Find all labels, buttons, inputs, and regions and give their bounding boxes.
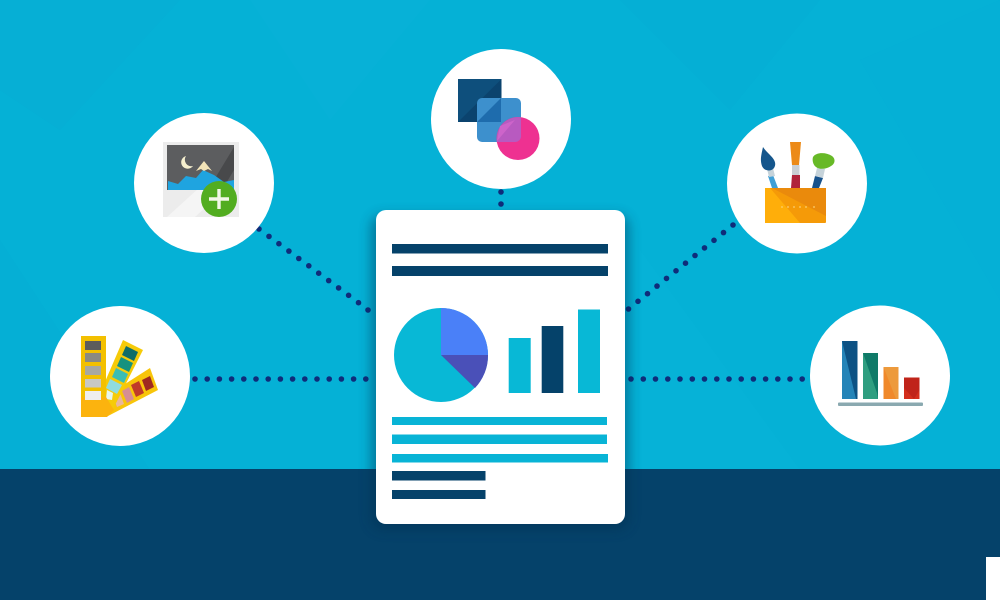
chart baseline	[838, 402, 923, 406]
red swatch strip	[100, 368, 158, 416]
orange bar	[884, 367, 898, 399]
right brush	[812, 153, 835, 188]
background: blue sky	[0, 0, 1000, 470]
icon circle: colour swatches	[50, 306, 190, 446]
pot stitching dots	[781, 206, 815, 208]
centre brush	[790, 142, 801, 188]
document page	[376, 210, 625, 524]
heading lines	[392, 244, 608, 276]
red bar	[904, 378, 920, 399]
photo mountains	[168, 170, 234, 190]
blue rounded square	[477, 98, 521, 142]
blue bar	[842, 341, 858, 399]
icon circle: add image	[134, 113, 274, 253]
short text lines	[392, 471, 486, 499]
photo frame	[163, 142, 239, 217]
dotted connector: left	[192, 376, 369, 382]
snow peak	[196, 161, 212, 171]
green bar	[863, 353, 878, 399]
dotted connector: upper right	[626, 222, 736, 312]
dotted connector: right	[628, 376, 805, 382]
document shadow	[371, 215, 629, 530]
pie chart	[394, 308, 488, 402]
grey swatch strip	[81, 336, 114, 417]
dark square	[458, 79, 502, 122]
white corner block	[986, 557, 1000, 600]
orange pot	[765, 188, 826, 223]
icon circle: overlapping shapes	[431, 49, 571, 189]
dotted connector: top	[498, 189, 504, 207]
document panel	[371, 210, 629, 530]
icon circle: paint brushes	[727, 114, 867, 254]
pink circle	[496, 117, 540, 160]
teal swatch strip	[92, 340, 143, 415]
crescent moon	[181, 156, 193, 169]
background: dark navy floor	[0, 469, 1000, 600]
bar chart	[509, 310, 600, 393]
plus sign	[209, 189, 229, 209]
dotted connector: upper left	[256, 226, 371, 313]
left brush	[761, 147, 778, 188]
body text lines	[392, 417, 608, 462]
green plus badge	[201, 181, 237, 217]
icon circle: bar chart	[810, 306, 950, 446]
photo night sky	[167, 145, 234, 190]
